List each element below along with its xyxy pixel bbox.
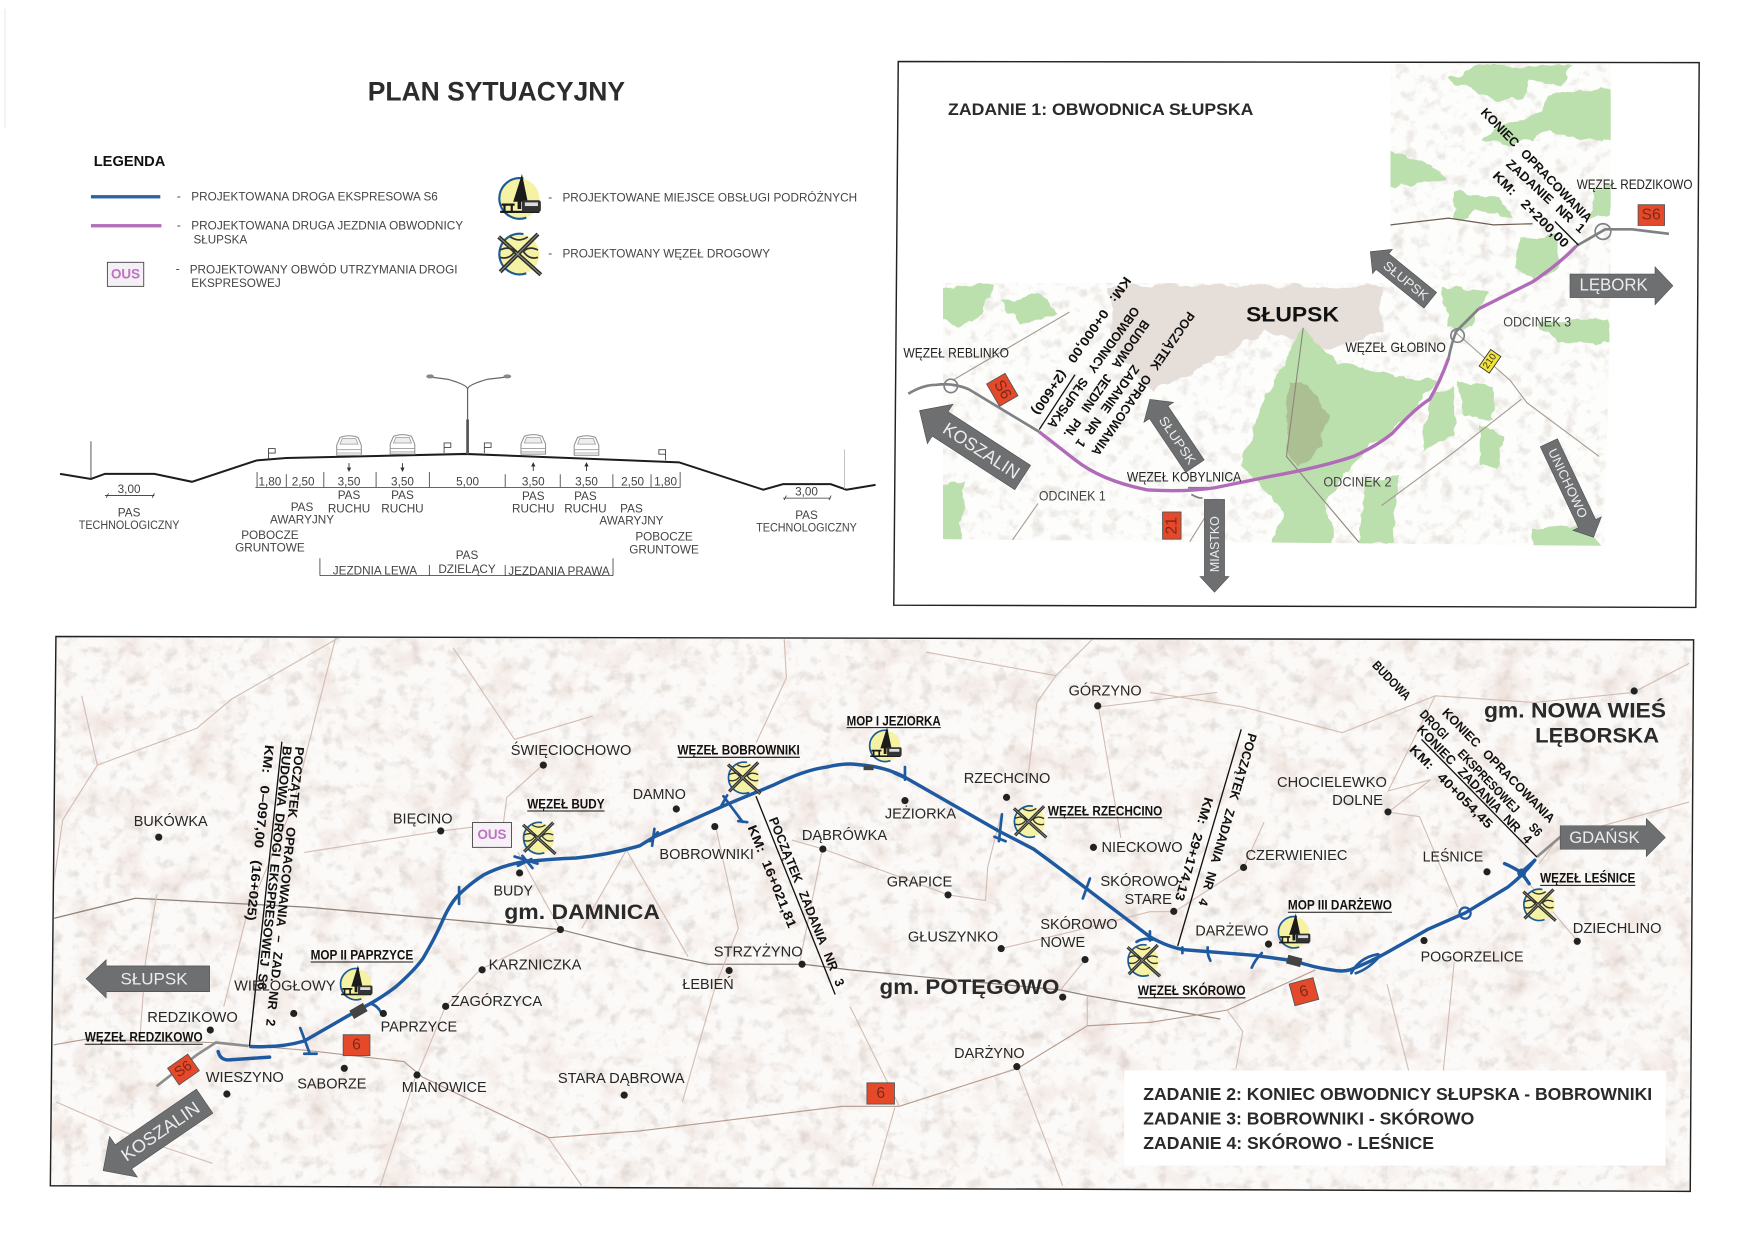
existing road sections grey	[908, 224, 1669, 498]
underlined facility labels: WĘZEŁ BUDY	[527, 796, 605, 812]
cross-section labels: GRUNTOWE	[629, 543, 699, 556]
note: end of task 4: KONIEC ZADANIA NR 4	[1414, 722, 1536, 847]
dimension values: 3,50	[522, 475, 545, 488]
settlement labels: SKÓROWO	[1100, 873, 1179, 890]
chainage line Redzikowo side	[1555, 221, 1578, 245]
arrow: Słupsk south	[1135, 389, 1210, 476]
icon: service area Darżewo	[1278, 913, 1310, 948]
legend item: interchange icon and text: PROJEKTOWANY WĘZEŁ DROGOWY	[562, 247, 770, 261]
legend item: OUS maintenance unit: OUS	[111, 267, 140, 282]
settlement labels: DARŻYNO	[954, 1044, 1025, 1062]
settlement dots	[155, 687, 1638, 1099]
road marker S6 west: S6	[990, 377, 1015, 403]
underlined facility labels	[85, 712, 1635, 1045]
icon: service area Paprzyce	[340, 965, 373, 1000]
road marker S6 east: S6	[1642, 206, 1661, 223]
settlement labels: BIĘCINO	[393, 810, 453, 827]
settlement labels: DZIECHLINO	[1573, 920, 1662, 937]
ground profile	[60, 454, 876, 490]
road marker 21	[1163, 512, 1181, 539]
panel: tasks 2-4 route map	[50, 632, 1695, 1191]
dimension lines	[105, 472, 831, 576]
arrow: Słupsk south: SŁUPSK	[1156, 413, 1199, 467]
note: end of task 4: BUDOWA DROGI EKSPRESOWEJ S6	[1369, 658, 1546, 840]
task 2 line: ZADANIE 2: KONIEC OBWODNICY SŁUPSKA - BOBROWNIKI	[1143, 1084, 1652, 1104]
topographic map background	[50, 632, 1695, 1191]
panel frame and base	[50, 636, 1694, 1191]
cross-section labels: PAS	[456, 549, 479, 562]
municipality label Nowa Wieś Lęborska	[1484, 697, 1666, 747]
arrow: Miastko: MIASTKO	[1207, 516, 1222, 572]
municipality label Damnica: gm. DAMNICA	[504, 900, 660, 924]
cars	[337, 435, 599, 455]
settlement labels: GŁUSZYNKO	[908, 928, 998, 945]
chainage lines	[249, 729, 1537, 1046]
cross-section labels: JEZDNIA LEWA	[333, 564, 417, 577]
dimension values: 3,00	[118, 483, 141, 496]
dimension values: 3,50	[338, 475, 361, 488]
arrow: Miastko	[1200, 499, 1229, 592]
settlement labels: WIELOGŁOWY	[234, 978, 335, 995]
note: start of task 2: KM: 0–097,00 (16+025)	[244, 744, 277, 922]
underlined facility labels: WĘZEŁ REDZIKOWO	[85, 1029, 203, 1045]
legend item: interchange icon and text	[499, 234, 770, 275]
cross-section labels: JEZDANIA PRAWA	[508, 565, 610, 578]
settlement labels: KARZNICZKA	[489, 957, 582, 974]
note: end of task 4: KONIEC OPRACOWANIA	[1439, 705, 1558, 826]
road marker 210	[1479, 350, 1501, 373]
task 3 line: ZADANIE 3: BOBROWNIKI - SKÓROWO	[1143, 1109, 1474, 1129]
cross-section labels: PAS	[574, 490, 597, 503]
panel: task 1 Słupsk bypass map	[894, 62, 1699, 607]
icon: service area Jeziorka	[869, 727, 902, 762]
panel: legend	[91, 154, 857, 290]
settlement labels: STARE	[1124, 891, 1172, 908]
settlement labels: RZECHCINO	[964, 770, 1051, 787]
chainage line Reblinko side	[1039, 375, 1075, 430]
arrow: Lębork	[1570, 267, 1673, 305]
barrier posts	[91, 441, 845, 489]
settlement labels: STARA DĄBROWA	[558, 1070, 685, 1087]
map labels task 1: WĘZEŁ REDZIKOWO	[1577, 176, 1693, 192]
dimension values: 2,50	[292, 475, 315, 488]
note: start of task 2	[244, 744, 307, 1027]
topographic map background	[940, 62, 1613, 554]
arrow: Słupsk	[86, 960, 210, 998]
settlement labels: DARŻEWO	[1195, 922, 1269, 940]
legend item: travellers service area icon and text: PROJEKTOWANE MIEJSCE OBSŁUGI PODRÓŻNYCH	[562, 190, 857, 205]
cross-section labels: RUCHU	[328, 502, 370, 515]
map labels task 1: WĘZEŁ GŁOBINO	[1345, 339, 1446, 355]
dimension values: 3,50	[391, 475, 414, 488]
legend item: purple second carriageway line: PROJEKTOWANA DRUGA JEZDNIA OBWODNICY	[191, 219, 463, 233]
note: end of task 1: ZADANIE NR 1	[1503, 156, 1588, 236]
cross-section labels: TECHNOLOGICZNY	[756, 521, 857, 534]
dimension values: 1,80	[259, 475, 282, 488]
underlined facility labels: WĘZEŁ SKÓROWO	[1138, 981, 1246, 998]
arrow: Ustka / Unichowo	[1535, 436, 1608, 544]
legend item: purple second carriageway line: SŁUPSKA	[194, 232, 248, 246]
task 1 heading: ZADANIE 1: OBWODNICA SŁUPSKA	[948, 100, 1253, 119]
chart: road cross-section	[60, 374, 876, 578]
panel frame	[894, 62, 1699, 607]
settlement labels: REDZIKOWO	[147, 1009, 238, 1026]
arrow: Słupsk north	[1360, 240, 1440, 312]
arrow: Słupsk: SŁUPSK	[120, 969, 188, 988]
arrow: Koszalin: KOSZALIN	[117, 1098, 203, 1165]
icon: interchange Rzechcino	[1014, 806, 1046, 838]
arrow: Gdańsk	[1560, 818, 1665, 857]
arrow: Ustka / Unichowo: UNICHOWO	[1545, 446, 1591, 520]
settlement labels: LEŚNICE	[1423, 848, 1483, 866]
road marker S6 west	[987, 373, 1018, 406]
cross-section labels: POBOCZE	[635, 531, 693, 544]
settlement labels: MIANOWICE	[402, 1079, 487, 1096]
cross-section labels: PAS	[291, 501, 314, 514]
settlement labels: WIESZYNO	[206, 1069, 284, 1086]
legend item: OUS maintenance unit: EKSPRESOWEJ	[191, 276, 281, 290]
direction arrows	[347, 463, 588, 471]
settlement labels: SKÓROWO	[1040, 916, 1118, 933]
road marker S6: S6	[172, 1058, 195, 1081]
underlined facility labels: MOP I JEZIORKA	[847, 712, 941, 728]
road marker 6 south	[867, 1083, 894, 1104]
cross-section labels: POBOCZE	[241, 529, 299, 542]
note: start of task 1: KM: 0+000,00 (2+600)	[1029, 274, 1135, 418]
dimension values: 1,80	[654, 475, 677, 488]
legend item: blue expressway line: PROJEKTOWANA DROGA EKSPRESOWA S6	[191, 189, 438, 203]
note: start of task 2: POCZĄTEK OPRACOWANIA – ZAD. NR 2	[263, 746, 307, 1027]
road marker S6 east	[1638, 205, 1665, 225]
legend item: OUS maintenance unit	[107, 261, 458, 290]
note: end of task 1: KM: 2+200,00	[1490, 168, 1572, 251]
cross-section labels: PAS	[391, 489, 414, 502]
note: start of task 1	[1029, 274, 1198, 459]
underlined facility labels: WĘZEŁ BOBROWNIKI	[677, 741, 800, 757]
cross-section labels	[79, 489, 857, 578]
legend item: purple second carriageway line	[91, 218, 463, 246]
cross-section labels: DZIELĄCY	[438, 563, 496, 576]
note: end of task 4: KM: 40+054,45	[1406, 742, 1496, 831]
settlement labels: SABORZE	[297, 1076, 366, 1093]
scan edge mark	[4, 9, 6, 129]
road marker 210: 210	[1481, 352, 1499, 371]
settlement labels: ZAGÓRZYCA	[451, 993, 543, 1010]
cross-section labels: PAS	[795, 509, 818, 522]
note: start of task 2: BUDOWA DROGI EKSPRESOWEJ S6	[254, 745, 295, 991]
legend item: travellers service area icon and text: -	[548, 190, 552, 204]
dimension values: 3,00	[795, 486, 818, 499]
settlement labels: CHOCIELEWKO	[1277, 774, 1387, 791]
settlement labels: GÓRZYNO	[1069, 682, 1142, 699]
settlement labels: DOLNE	[1332, 792, 1383, 809]
note: start of task 1: OBWODNICY SŁUPSKA	[1045, 304, 1143, 431]
underlined facility labels: WĘZEŁ RZECHCINO	[1048, 802, 1162, 818]
settlement labels: BOBROWNIKI	[659, 846, 754, 863]
arrow: Lębork: LĘBORK	[1579, 275, 1648, 295]
map labels task 1	[903, 176, 1693, 504]
map labels task 1: WĘZEŁ KOBYLNICA	[1127, 469, 1242, 485]
settlement labels: GRAPICE	[887, 874, 952, 891]
arrow: Gdańsk: GDAŃSK	[1569, 828, 1640, 847]
icon: interchange Skórowo	[1128, 945, 1160, 976]
arrow: Koszalin: KOSZALIN	[939, 419, 1023, 483]
icon: interchange Budy	[523, 822, 556, 854]
cross-section labels: PAS	[118, 506, 141, 519]
note: end of task 1: KONIEC OPRACOWANIA	[1478, 105, 1595, 225]
cross-section labels: PAS	[522, 490, 545, 503]
tasks list box	[1124, 1071, 1666, 1166]
legend item: travellers service area icon and text	[499, 174, 857, 219]
cross-section labels: RUCHU	[381, 502, 424, 515]
cross-section labels: TECHNOLOGICZNY	[79, 519, 180, 532]
cross-section labels: PAS	[338, 489, 360, 502]
settlement labels: NOWE	[1040, 934, 1085, 951]
settlement labels: ŚWIĘCIOCHOWO	[511, 741, 632, 759]
cross-section labels: RUCHU	[564, 503, 607, 516]
city label Słupsk: SŁUPSK	[1246, 302, 1340, 326]
road marker 6 south: 6	[876, 1085, 885, 1102]
underlined facility labels: WĘZEŁ LEŚNICE	[1540, 869, 1635, 886]
legend item: blue expressway line	[91, 189, 438, 203]
S6 route blue line	[251, 764, 1535, 1047]
road marker 21: 21	[1163, 517, 1180, 534]
legend item: purple second carriageway line: -	[177, 218, 181, 232]
municipality label Potęgowo: gm. POTĘGOWO	[880, 975, 1059, 999]
legend item: interchange icon and text: -	[548, 246, 552, 260]
underlined facility labels: MOP II PAPRZYCE	[311, 946, 413, 962]
map labels task 1: WĘZEŁ REBLINKO	[903, 344, 1009, 360]
OUS marker	[473, 823, 512, 847]
legend heading: LEGENDA	[94, 154, 166, 170]
title: PLAN SYTUACYJNY	[368, 76, 625, 106]
designed second carriageway purple	[1039, 246, 1576, 491]
settlement labels	[134, 682, 1662, 1096]
cross-section labels: PAS	[620, 502, 643, 515]
cross-section labels: AWARYJNY	[270, 513, 334, 526]
road marker S6	[168, 1054, 199, 1085]
note: start of task 4: KM: 29+174,13	[1172, 795, 1216, 903]
OUS marker: OUS	[477, 827, 507, 842]
icon: interchange Bobrowniki	[728, 762, 760, 794]
settlement labels: DĄBRÓWKA	[802, 827, 888, 844]
settlement labels: STRZYŻYNO	[714, 943, 803, 961]
settlement labels: POGORZELICE	[1421, 948, 1524, 965]
cross-section labels: AWARYJNY	[599, 515, 664, 528]
map labels task 1: ODCINEK 1	[1039, 488, 1106, 504]
settlement labels: ŁEBIEŃ	[682, 976, 734, 993]
dimension values: 3,50	[575, 475, 598, 488]
road marker 6 east: 6	[1298, 982, 1311, 1001]
cross-section labels: RUCHU	[512, 503, 554, 516]
dimension values: 5,00	[456, 475, 479, 488]
road marker 6 Paprzyce: 6	[352, 1036, 361, 1053]
arrow: Słupsk north: SŁUPSK	[1380, 258, 1432, 304]
interchange and crossing details on route	[218, 766, 1535, 1060]
note: start of task 4: POCZĄTEK ZADANIA NR 4	[1195, 732, 1260, 908]
municipality label Nowa Wieś Lęborska: gm. NOWA WIEŚ	[1484, 697, 1666, 722]
dimension values: 2,50	[621, 475, 644, 488]
icon: interchange Leśnice	[1523, 889, 1556, 921]
map labels task 1: ODCINEK 3	[1503, 313, 1571, 329]
settlement labels: DAMNO	[633, 786, 686, 803]
existing road at Redzikowo	[157, 837, 1560, 1086]
note: start of task 3: POCZĄTEK ZADANIA NR 3	[766, 815, 848, 989]
map labels task 1: ODCINEK 2	[1323, 474, 1392, 490]
municipality label Nowa Wieś Lęborska: LĘBORSKA	[1535, 723, 1659, 747]
cross-section labels: GRUNTOWE	[235, 541, 305, 554]
legend item: OUS maintenance unit: PROJEKTOWANY OBWÓD UTRZYMANIA DROGI	[190, 262, 458, 277]
settlement labels: BUKÓWKA	[134, 813, 208, 830]
settlement labels: NIECKOWO	[1102, 839, 1183, 856]
settlement labels: CZERWIENIEC	[1245, 847, 1348, 864]
note: start of task 3: KM: 16+021,81	[745, 823, 800, 930]
lighting pole	[426, 374, 511, 454]
arrow: Koszalin	[907, 391, 1035, 497]
note: start of task 1: ZADANIE NR 1	[1073, 362, 1143, 451]
settlement labels: JEŻIORKA	[885, 804, 957, 822]
note: start of task 1: BUDOWA JEZDNI PN.	[1061, 317, 1153, 441]
task 4 line: ZADANIE 4: SKÓROWO - LEŚNICE	[1143, 1133, 1434, 1153]
settlement labels: PAPRZYCE	[381, 1019, 457, 1036]
note: start of task 1: POCZĄTEK OPRACOWANIA	[1089, 309, 1198, 459]
arrow: Koszalin	[89, 1081, 219, 1191]
legend item: blue expressway line: -	[177, 189, 181, 203]
settlement labels: BUDY	[494, 883, 533, 900]
underlined facility labels: MOP III DARŻEWO	[1288, 897, 1392, 913]
legend item: OUS maintenance unit: -	[176, 261, 180, 275]
road marker 6 Paprzyce	[343, 1035, 370, 1056]
road marker 6 east	[1289, 978, 1319, 1006]
dimension values	[118, 475, 818, 499]
